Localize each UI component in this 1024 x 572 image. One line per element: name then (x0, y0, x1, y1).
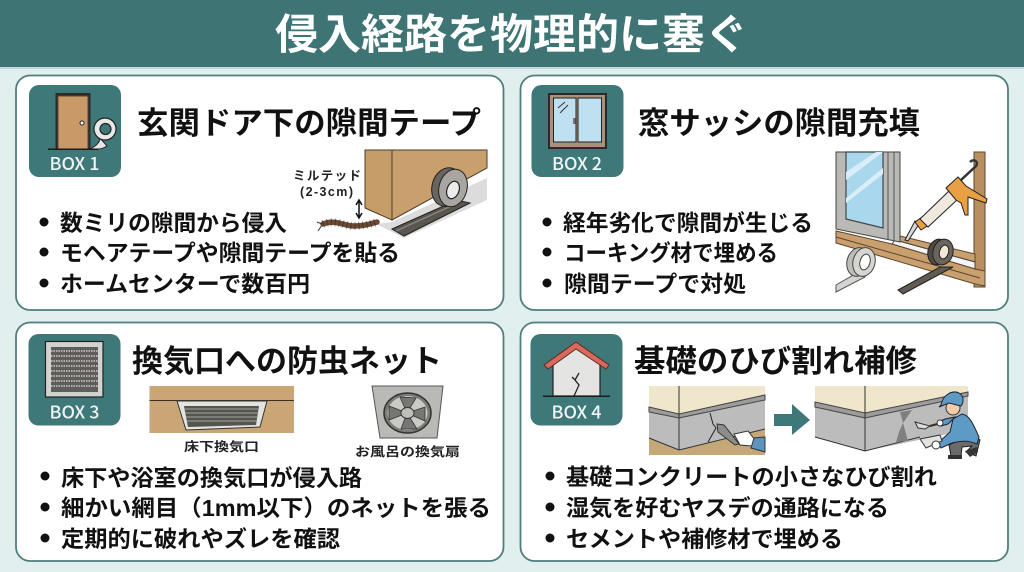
title: 侵入経路を物理的に塞ぐ (275, 11, 748, 58)
bullet list: ホームセンターで数百円 (60, 271, 310, 297)
illustration: underfloor vent (150, 386, 294, 454)
bullet list (40, 210, 400, 297)
bullet list: 湿気を好むヤスデの通路になる (566, 495, 889, 521)
icon: worker (915, 392, 980, 459)
caption: 床下換気口 (184, 439, 259, 454)
badge: box 3: BOX 3 (50, 400, 100, 424)
bullet list: 隙間テープで対処 (564, 271, 746, 297)
panel: box 2 window sash (520, 76, 1008, 310)
heading: 玄関ドア下の隙間テープ (137, 106, 481, 141)
bullet list: 経年劣化で隙間が生じる (563, 210, 813, 236)
illustration: door, tape and centipede (293, 150, 487, 238)
heading: 窓サッシの隙間充填 (638, 106, 920, 141)
bullet list: 基礎コンクリートの小さなひび割れ (566, 464, 937, 490)
badge: box 1: BOX 1 (50, 151, 100, 176)
bullet list: モヘアテープや隙間テープを貼る (60, 240, 400, 266)
bullet list (40, 465, 491, 552)
badge: box 2 (532, 85, 624, 177)
illustration: bath fan (355, 386, 460, 459)
bullet list: 細かい網目（1mm以下）のネットを張る (61, 495, 491, 521)
header band (0, 0, 1024, 69)
badge: box 4 (530, 334, 622, 426)
bullet list: 床下や浴室の換気口が侵入路 (61, 465, 362, 491)
panel: box 1 door gap tape (16, 76, 504, 310)
illustration: door, tape and centipede: ミルテッド (293, 169, 361, 183)
illustration: door, tape and centipede: (2-3cm) (300, 185, 353, 199)
illustration: crack before repair (649, 386, 765, 455)
badge: box 1 (29, 85, 121, 177)
bullet list: セメントや補修材で埋める (566, 526, 843, 552)
bullet list (546, 464, 937, 552)
heading: 換気口への防虫ネット (132, 344, 442, 379)
badge: box 4: BOX 4 (552, 400, 602, 424)
illustration: window, caulking gun and tape (836, 152, 987, 294)
arrow (774, 404, 810, 435)
bullet list: 定期的に破れやズレを確認 (61, 526, 340, 552)
badge: box 2: BOX 2 (552, 151, 602, 176)
panel: box 4 foundation cracks (520, 322, 1008, 561)
panel: box 3 vent net (16, 322, 504, 561)
illustration: repair after (815, 386, 980, 459)
bullet list (542, 210, 813, 297)
badge: box 3 (28, 334, 120, 426)
bullet list: 数ミリの隙間から侵入 (60, 210, 287, 236)
heading: 基礎のひび割れ補修 (634, 344, 917, 379)
bullet list: コーキング材で埋める (564, 240, 778, 266)
caption: お風呂の換気扇 (355, 444, 460, 459)
